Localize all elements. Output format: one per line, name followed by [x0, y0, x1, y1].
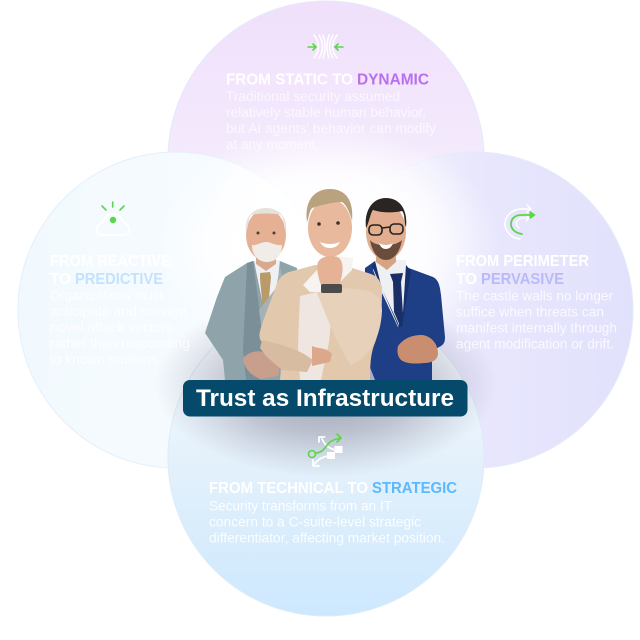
panel: reactive to predictive — [50, 202, 190, 367]
heading — [50, 253, 171, 288]
person: woman in beige blazer — [259, 189, 382, 380]
heading: PERVASIVE — [481, 271, 564, 288]
body text: but AI agents' behavior can modify — [226, 121, 436, 136]
banner: Trust as Infrastructure — [183, 380, 468, 416]
body text: at any moment. — [226, 137, 319, 152]
body text: novel attack vectors — [50, 320, 173, 335]
body text: relatively stable human behavior, — [226, 105, 426, 120]
body text — [50, 288, 190, 367]
heading: FROM REACTIVE — [50, 253, 171, 270]
body text: Organizations must — [50, 288, 163, 303]
body text: to known patterns. — [50, 352, 162, 367]
body text — [226, 89, 436, 152]
panel: technical to strategic — [209, 434, 457, 546]
circle: reactive to predictive — [18, 152, 334, 468]
shadow around banner — [154, 293, 498, 477]
body text: Traditional security assumed — [226, 89, 400, 104]
body text — [456, 288, 617, 352]
body text: agent modification or drift. — [456, 336, 614, 352]
heading — [209, 480, 457, 497]
body text: rather than responding — [50, 336, 190, 351]
body text: Security transforms from an IT — [209, 498, 392, 514]
circle: static to dynamic — [168, 1, 484, 317]
heading: DYNAMIC — [357, 72, 429, 88]
body text: differentiator, affecting market position. — [209, 530, 445, 546]
heading: FROM STATIC TO — [226, 72, 353, 88]
icon: converging arrows — [308, 35, 343, 58]
heading: TO — [456, 271, 477, 288]
panel: static to dynamic — [226, 35, 436, 152]
heading: PREDICTIVE — [75, 271, 163, 288]
circle: technical to strategic — [168, 300, 484, 616]
icon: alert bell cloud — [97, 202, 129, 235]
heading — [456, 253, 589, 288]
body text: anticipate and prevent — [50, 304, 187, 319]
body text — [209, 498, 445, 546]
heading: FROM PERIMETER — [456, 253, 589, 270]
body text: concern to a C-suite-level strategic — [209, 514, 421, 530]
center glow — [151, 125, 501, 365]
people photo — [205, 189, 445, 380]
body text: The castle walls no longer — [456, 288, 613, 304]
heading — [226, 72, 429, 88]
person: older man in grey suit — [205, 208, 300, 380]
heading: STRATEGIC — [372, 480, 457, 497]
body text: manifest internally through — [456, 320, 617, 336]
panel: perimeter to pervasive — [456, 205, 617, 352]
banner: Trust as Infrastructure: Trust as Infrastructure — [196, 385, 454, 412]
icon: curved arrow — [505, 205, 535, 239]
heading: FROM TECHNICAL TO — [209, 480, 368, 497]
person: man in navy suit — [363, 198, 445, 380]
heading: TO — [50, 271, 71, 288]
body text: suffice when threats can — [456, 304, 604, 320]
circle: perimeter to pervasive — [317, 152, 633, 468]
icon: branching paths — [308, 434, 342, 466]
